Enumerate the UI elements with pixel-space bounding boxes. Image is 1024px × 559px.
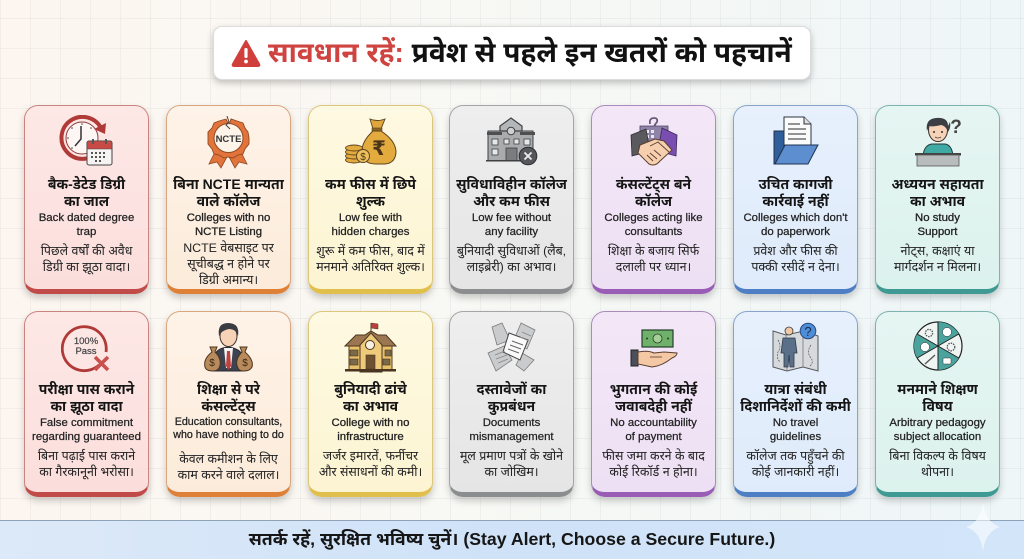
icon: consultant with money bags: $ — [242, 358, 248, 369]
icon: warning triangle — [232, 40, 260, 67]
icon: money bag with coins: $ — [360, 152, 366, 163]
card text: Low fee with — [339, 212, 402, 224]
card text: regarding guaranteed — [32, 431, 141, 443]
panel: no NCTE listing — [166, 105, 291, 294]
card text: No study — [915, 212, 960, 224]
card text: मार्गदर्शन न मिलना। — [894, 260, 981, 274]
card text: उचित कागजी — [758, 176, 833, 192]
icon: college building with cross — [486, 117, 538, 166]
panel: low fee hidden charges — [308, 105, 433, 294]
icon: banknote above open hand — [630, 329, 678, 368]
card text: कोई रिकॉर्ड न होना। — [609, 465, 698, 479]
card text: बैक-डेटेड डिग्री — [48, 176, 125, 192]
heading text: सावधान रहें: प्रवेश से पहले इन खतरों को पहचानें — [268, 37, 792, 68]
card text: वाले कॉलेज — [197, 192, 260, 208]
card text: सूचीबद्ध न होने पर — [187, 256, 270, 270]
panel: arbitrary pedagogy — [875, 311, 1000, 497]
card text: का जाल — [64, 192, 109, 208]
icon: 100% pass with cross: 100% — [74, 336, 99, 347]
card text — [743, 176, 848, 274]
card text: No accountability — [610, 417, 697, 429]
card text: Education consultants, — [175, 416, 282, 428]
card text: शुरू में कम फीस, बाद में — [316, 244, 425, 258]
panel: no paperwork — [733, 105, 858, 294]
icon: sparkle watermark — [966, 504, 1000, 551]
panel: back dated degree trap — [24, 105, 149, 294]
card text: Back dated degree — [39, 212, 134, 224]
card text: बिना पढ़ाई पास कराने — [38, 448, 135, 462]
panel: no accountability of payment — [591, 311, 716, 497]
panel: no infrastructure — [308, 311, 433, 497]
panel: colleges acting like consultants — [591, 105, 716, 294]
card text: केवल कमीशन के लिए — [179, 452, 278, 466]
panel: no study support — [875, 105, 1000, 294]
icon: 100% pass with cross — [61, 325, 110, 372]
icon: folder with documents — [774, 116, 819, 164]
title banner — [213, 26, 811, 80]
card text: मनमाने शिक्षण — [897, 380, 978, 396]
card text: दस्तावेजों का — [477, 380, 546, 396]
card text: दलाली पर ध्यान। — [616, 260, 691, 274]
card text: Colleges with no — [187, 212, 270, 224]
card text: कंसल्टेंट्स बने — [616, 176, 691, 192]
card text: consultants — [625, 226, 682, 238]
card text: बिना NCTE मान्यता — [173, 176, 284, 192]
card text: प्रवेश और फीस की — [753, 244, 838, 258]
card text: mismanagement — [469, 431, 554, 443]
card text: दिशानिर्देशों की कमी — [740, 398, 851, 414]
card text — [604, 176, 703, 274]
card text: थोपना। — [921, 465, 954, 479]
card text — [316, 176, 425, 274]
card text: भुगतान की कोई — [610, 380, 697, 396]
card text: यात्रा संबंधी — [764, 380, 827, 396]
card text: No travel — [773, 417, 818, 429]
icon: confused student at desk: ? — [950, 117, 962, 138]
card text: का जोखिम। — [484, 465, 539, 479]
card text: बिना विकल्प के विषय — [889, 448, 986, 462]
card text: डिग्री का झूठा वादा। — [43, 260, 130, 274]
card text: पिछले वर्षों की अवैध — [41, 244, 132, 258]
icon: 100% pass with cross: Pass — [75, 346, 97, 357]
card text: बुनियादी ढांचे — [334, 380, 407, 396]
card text: do paperwork — [761, 226, 830, 238]
card text: infrastructure — [337, 431, 404, 443]
card text — [456, 176, 568, 274]
card text: कम फीस में छिपे — [325, 176, 416, 192]
icon: confused student at desk — [915, 117, 962, 166]
card text — [32, 380, 141, 480]
icon: money bag with coins: ₹ — [372, 136, 386, 160]
card text: Documents — [483, 417, 540, 429]
card text: फीस जमा करने के बाद — [602, 448, 705, 462]
card text — [602, 380, 705, 479]
card text — [173, 380, 284, 482]
panel: false pass commitment — [24, 311, 149, 497]
card text: का झूठा वादा — [50, 398, 123, 414]
icon: scattered documents — [488, 322, 536, 372]
card text — [39, 176, 134, 274]
card text: लाइब्रेरी) का अभाव। — [467, 260, 556, 274]
icon: person on map with question: ? — [804, 324, 812, 339]
icon: NCTE broken seal: NCTE — [216, 134, 241, 145]
card text — [889, 380, 986, 479]
card text: का गैरकानूनी भरोसा। — [39, 465, 134, 479]
card text: मूल प्रमाण पत्रों के खोने — [460, 448, 563, 462]
card text: और संसाधनों की कमी। — [319, 465, 422, 479]
card text: College with no — [332, 417, 409, 429]
icon: subject wheel — [913, 321, 963, 371]
card text: guidelines — [770, 431, 821, 443]
card text: trap — [77, 226, 96, 238]
card text: कॉलेज तक पहुँचने की — [746, 448, 845, 462]
card text: पक्की रसीदें न देना। — [751, 260, 840, 274]
card text: शिक्षा के बजाय सिर्फ — [608, 244, 699, 258]
card text — [173, 176, 284, 286]
card text: परीक्षा पास कराने — [39, 380, 134, 396]
card text: शिक्षा से परे — [197, 380, 260, 396]
card text: का अभाव — [910, 192, 965, 208]
card text: जवाबदेही नहीं — [615, 398, 692, 414]
card text — [891, 176, 984, 274]
card text: विषय — [922, 398, 953, 414]
icon: handshake with building — [630, 117, 678, 166]
card text: of payment — [625, 431, 682, 443]
card text: NCTE वेबसाइट पर — [183, 240, 274, 254]
card text: कोई जानकारी नहीं। — [752, 465, 839, 479]
card text: अध्ययन सहायता — [891, 176, 984, 192]
card text: जर्जर इमारतें, फर्नीचर — [323, 448, 418, 462]
card text: शुल्क — [356, 192, 385, 208]
card text: Low fee without — [472, 212, 551, 224]
icon: person on map with question — [772, 322, 818, 372]
panel: low fee no facility — [449, 105, 574, 294]
card text: बुनियादी सुविधाओं (लैब, — [457, 244, 566, 258]
card text: hidden charges — [332, 226, 409, 238]
card text: काम करने वाले दलाल। — [178, 468, 279, 482]
card text: नोट्स, कक्षाएं या — [901, 244, 974, 258]
card text — [460, 380, 564, 479]
card text: Arbitrary pedagogy — [889, 417, 986, 429]
icon: consultant with money bags — [204, 323, 253, 372]
icon: clock and calendar — [59, 115, 112, 166]
card text: कुप्रबंधन — [488, 398, 535, 414]
card text: who have nothing to do — [173, 428, 284, 440]
card text: कंसल्टेंट्स — [201, 398, 256, 414]
card text: मनमाने अतिरिक्त शुल्क। — [316, 260, 425, 274]
icon: consultant with money bags: $ — [209, 358, 215, 369]
card text: डिग्री अमान्य। — [199, 272, 258, 286]
card text — [319, 380, 422, 479]
icon: NCTE broken seal — [208, 116, 250, 169]
icon: school building — [344, 322, 397, 372]
card text: subject allocation — [894, 431, 981, 443]
card text: और कम फीस — [473, 192, 550, 208]
icon: money bag with coins — [345, 118, 396, 164]
card text: का अभाव — [343, 398, 398, 414]
card text: सुविधाविहीन कॉलेज — [456, 176, 567, 192]
card text: कार्रवाई नहीं — [762, 192, 829, 208]
panel: documents mismanagement — [449, 311, 574, 497]
card text: any facility — [485, 226, 538, 238]
panel: no travel guidelines — [733, 311, 858, 497]
footer text: सतर्क रहें, सुरक्षित भविष्य चुनें। (Stay Alert, Choose a Secure Future.) — [249, 529, 775, 549]
card text: Support — [918, 226, 957, 238]
card text: NCTE Listing — [195, 226, 262, 238]
panel: education consultants — [166, 311, 291, 497]
card text: कॉलेज — [635, 192, 672, 208]
card text: Colleges acting like — [604, 212, 703, 224]
card text: Colleges which don't — [743, 212, 848, 224]
card text: False commitment — [40, 417, 133, 429]
footer banner — [0, 520, 1024, 559]
card text — [740, 380, 851, 479]
